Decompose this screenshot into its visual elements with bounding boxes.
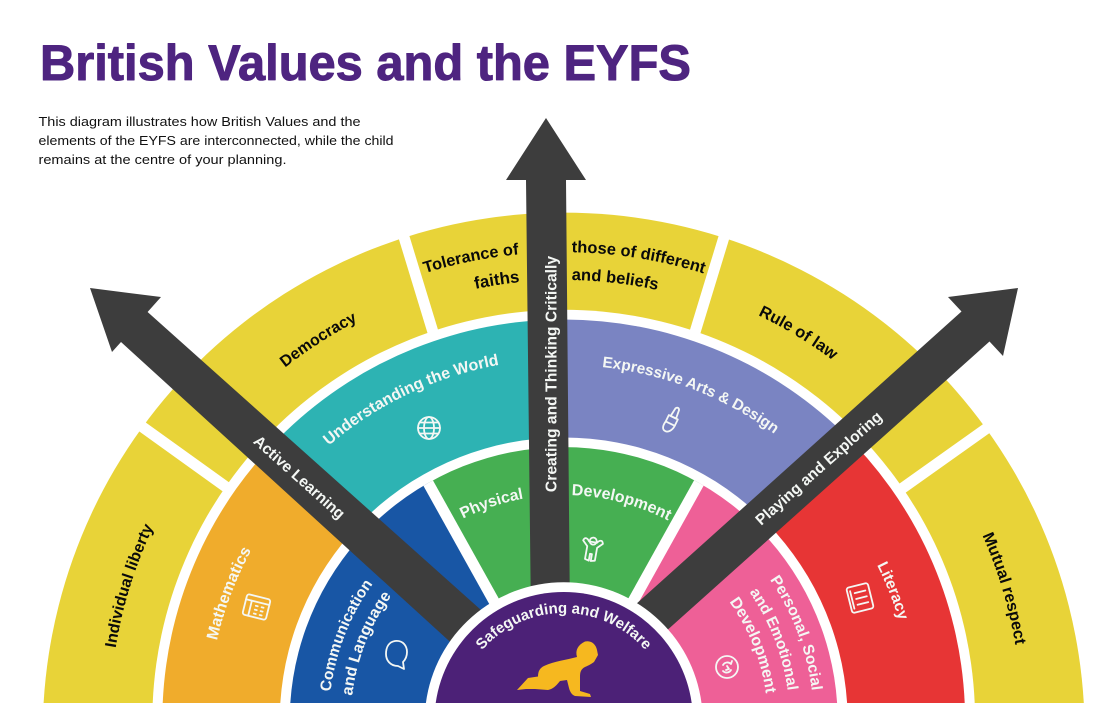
area labels xyxy=(206,354,907,696)
area labels: Development xyxy=(730,596,776,694)
area labels: Understanding the World xyxy=(322,354,498,444)
arrow: Creating and Thinking Critically xyxy=(506,118,586,620)
intro text: This diagram illustrates how British Values and the xyxy=(38,114,360,129)
area labels: and Emotional xyxy=(750,589,799,690)
arrow label: Creating and Thinking Critically: Creating and Thinking Critically xyxy=(544,256,560,492)
outer ring labels: Individual liberty xyxy=(105,524,154,648)
area labels: Literacy xyxy=(878,561,907,618)
panel: Safeguarding and Welfare centre xyxy=(426,582,702,703)
outer ring labels: faiths xyxy=(474,272,519,289)
intro text xyxy=(38,114,394,167)
intro text: elements of the EYFS are interconnected, while the child xyxy=(38,133,394,148)
outer ring labels: Democracy xyxy=(279,314,355,367)
area labels: Expressive Arts & Design xyxy=(603,356,778,434)
icon: book page xyxy=(846,583,874,613)
outer ring labels: Rule of law xyxy=(759,306,838,359)
label: Safeguarding and Welfare: Safeguarding and Welfare xyxy=(476,603,650,649)
icon: child figure xyxy=(580,536,604,563)
outer ring labels: Mutual respect xyxy=(982,532,1026,645)
title: British Values and the EYFS xyxy=(40,35,691,91)
panel: British Values outer ring xyxy=(44,213,1084,703)
arrow label: Playing and Exploring: Playing and Exploring xyxy=(753,408,886,529)
outer ring labels xyxy=(105,240,1026,648)
area labels: Communication xyxy=(320,580,372,690)
intro text: remains at the centre of your planning. xyxy=(38,152,286,167)
outer ring labels: Tolerance of xyxy=(422,242,518,272)
panel: EYFS prime areas ring xyxy=(290,447,838,703)
icon: speech bubble xyxy=(386,641,407,669)
icon: paint brush xyxy=(661,406,682,434)
panel: EYFS specific areas ring xyxy=(162,320,965,703)
icon: emotion circle xyxy=(716,656,738,678)
outer ring labels: and beliefs xyxy=(572,269,658,290)
area labels: Personal, Social xyxy=(770,574,823,690)
icon: calculator xyxy=(242,594,271,620)
area labels: Mathematics xyxy=(206,548,250,640)
outer ring labels: those of different xyxy=(572,240,706,274)
area labels: Physical xyxy=(459,488,522,518)
icon: crawling baby xyxy=(517,641,598,697)
arrow: Active Learning xyxy=(90,288,500,660)
area labels: Development xyxy=(572,484,672,520)
icon: globe xyxy=(418,417,440,439)
arrow label: Active Learning: Active Learning xyxy=(250,433,348,523)
area labels: and Language xyxy=(344,592,390,696)
arrow: Playing and Exploring xyxy=(615,288,1018,650)
